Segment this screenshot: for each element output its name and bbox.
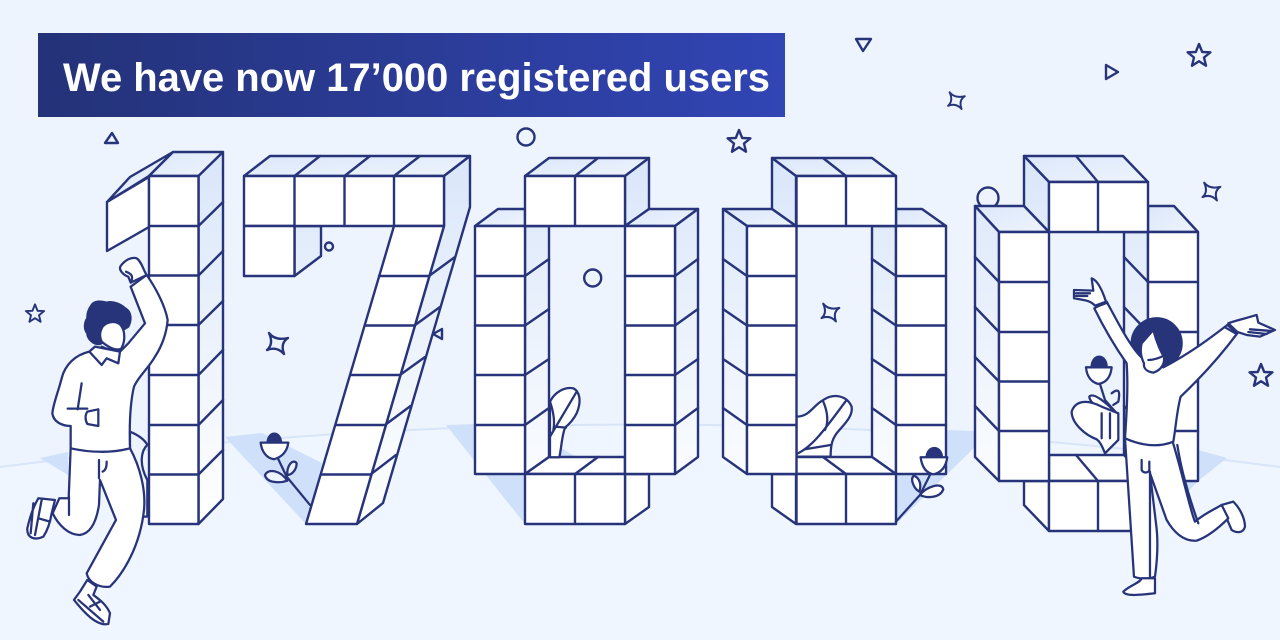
flower behind person bbox=[1072, 357, 1119, 453]
flower near seven bbox=[261, 434, 310, 505]
star bbox=[728, 130, 750, 152]
triangle bbox=[105, 133, 118, 143]
banner bbox=[38, 33, 785, 117]
person face bbox=[1141, 330, 1164, 373]
man collar bbox=[89, 347, 120, 365]
star bbox=[1250, 364, 1272, 386]
digit 7 bbox=[244, 156, 470, 524]
man hair bbox=[85, 302, 131, 344]
digit 0 second bbox=[723, 158, 946, 524]
man back shoe bbox=[27, 498, 55, 538]
man trousers bbox=[53, 448, 144, 587]
flower near second zero bbox=[896, 448, 947, 522]
circle bbox=[518, 128, 534, 146]
man raised fist bbox=[120, 258, 147, 283]
digit 0 third bbox=[975, 156, 1198, 531]
man front shoe bbox=[74, 580, 110, 624]
person sweater bbox=[1094, 302, 1237, 445]
triangle bbox=[856, 39, 871, 51]
circle bbox=[325, 242, 333, 250]
sparkle bbox=[822, 304, 839, 322]
ground bbox=[0, 424, 1280, 640]
man jumping bbox=[27, 258, 168, 624]
person front shoe bbox=[1123, 578, 1155, 595]
circle bbox=[584, 270, 601, 286]
star bbox=[1188, 44, 1210, 66]
man fist lower bbox=[86, 409, 98, 426]
person trousers bbox=[1125, 438, 1228, 579]
digit 0 first bbox=[475, 158, 698, 524]
person with arms raised bbox=[1074, 278, 1275, 595]
banner title: We have now 17’000 registered users bbox=[63, 56, 770, 100]
man face bbox=[100, 322, 124, 350]
person hair bbox=[1132, 318, 1182, 368]
person right hand bbox=[1228, 315, 1275, 337]
man plant behind leg bbox=[130, 432, 147, 517]
sparkle bbox=[948, 92, 965, 109]
person back shoe bbox=[1222, 502, 1245, 532]
plant in first zero bbox=[550, 388, 580, 457]
digit 1 bbox=[107, 152, 223, 524]
triangle bbox=[433, 329, 442, 339]
man sweater bbox=[52, 275, 168, 452]
decorative circle behind third zero bbox=[978, 188, 998, 208]
horizon line bbox=[0, 424, 1280, 467]
triangle bbox=[1106, 65, 1118, 79]
ground shadows bbox=[40, 424, 1227, 524]
sparkle bbox=[1202, 183, 1220, 200]
star bbox=[26, 304, 44, 322]
decorative shapes bbox=[26, 39, 1272, 386]
plant in second zero bbox=[797, 396, 852, 457]
person left hand bbox=[1074, 278, 1106, 306]
sparkle bbox=[267, 333, 288, 354]
